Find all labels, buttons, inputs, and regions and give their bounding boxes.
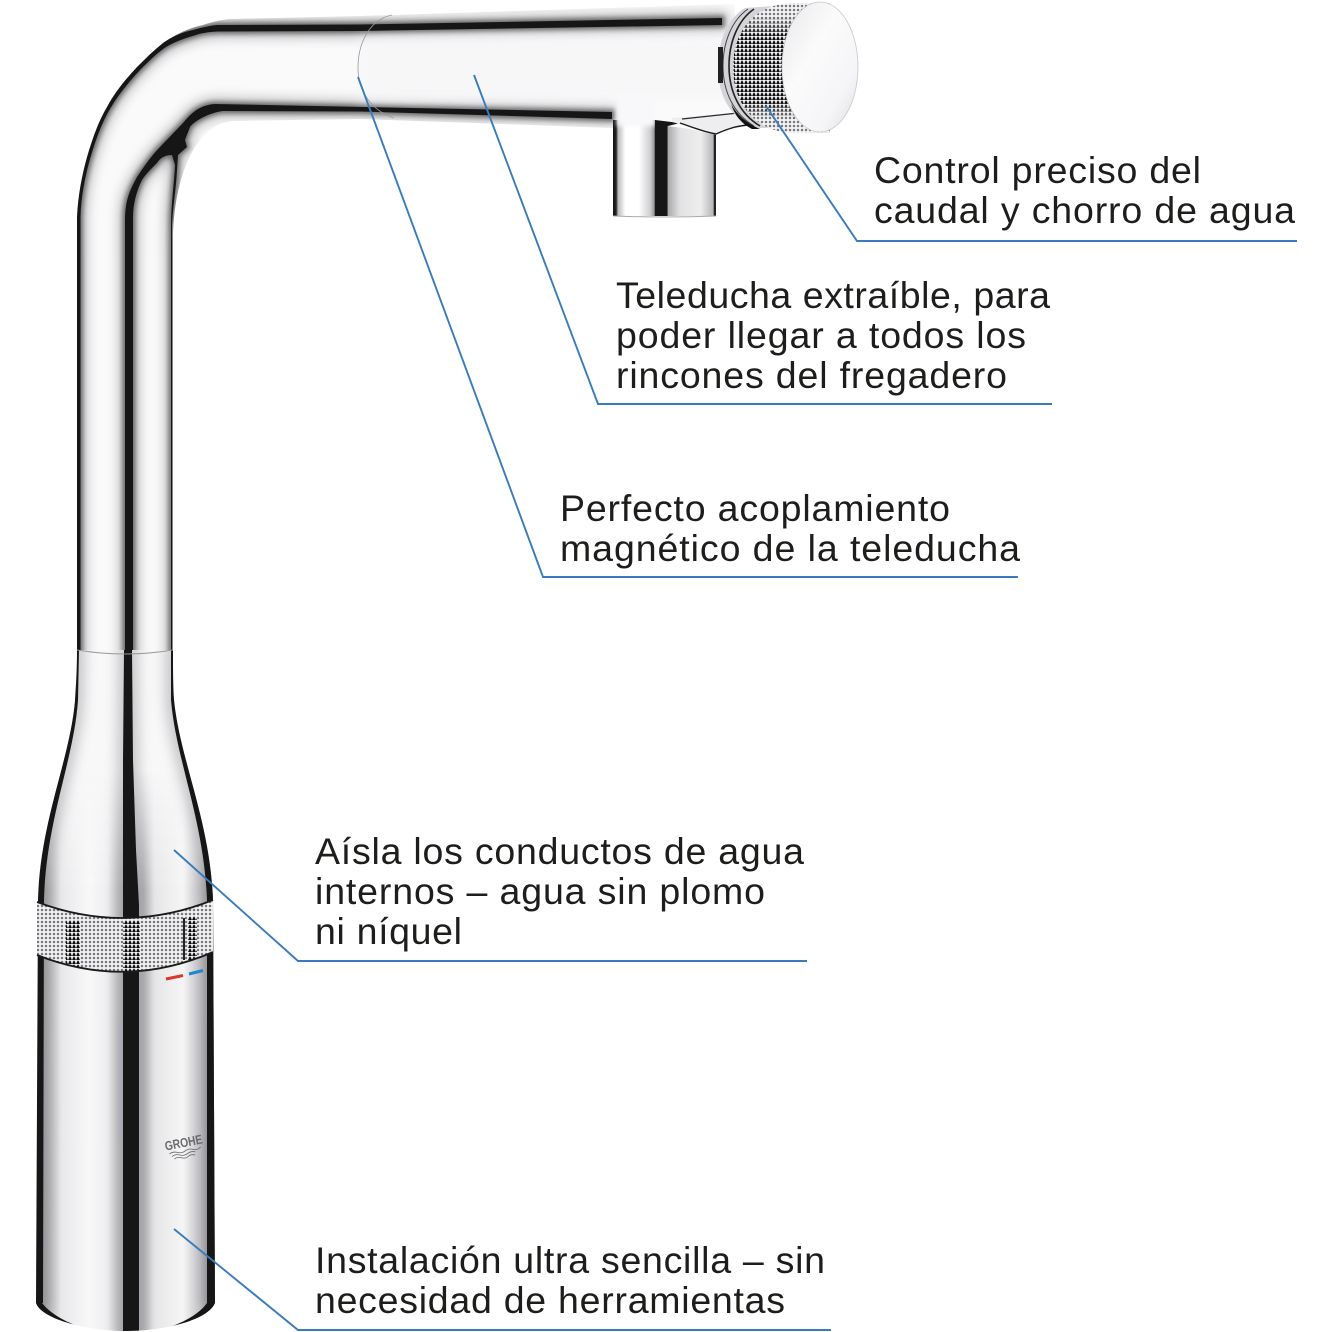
GROHE logo: GROHE [163, 1132, 204, 1154]
label text [560, 487, 1020, 569]
label text [616, 274, 1050, 396]
GROHE logo [163, 1132, 205, 1161]
label text: Perfecto acoplamiento [560, 487, 950, 529]
label text: poder llegar a todos los [616, 314, 1026, 356]
cold water mark [189, 970, 203, 974]
pull-out nozzle [613, 96, 748, 217]
spout seam [358, 15, 394, 118]
label text: magnético de la teleducha [560, 527, 1020, 569]
label text: Teleducha extraíble, para [616, 274, 1050, 316]
callout: teleducha extraíble [474, 75, 1052, 404]
callout: instalación [174, 1229, 831, 1330]
knurled knob [733, 3, 830, 133]
label text: internos – agua sin plomo [315, 870, 765, 912]
leader line [174, 1229, 831, 1330]
label text: necesidad de herramientas [315, 1279, 785, 1321]
leader line [766, 106, 1297, 241]
label text: ni níquel [315, 910, 462, 952]
hot water mark [166, 976, 183, 979]
label text [874, 149, 1295, 231]
upper tube and spout [70, 0, 750, 670]
leader line [358, 77, 1018, 577]
leader line [474, 75, 1052, 404]
label text [315, 830, 804, 952]
label text: Aísla los conductos de agua [315, 830, 804, 872]
label text [315, 1239, 825, 1321]
knurled band [36, 900, 214, 973]
body seam [77, 650, 173, 654]
label text: caudal y chorro de agua [874, 189, 1295, 231]
lower body [30, 645, 220, 1332]
faucet illustration [30, 0, 858, 1332]
label text: Instalación ultra sencilla – sin [315, 1239, 825, 1281]
label text: Control preciso del [874, 149, 1201, 191]
knob collar [718, 6, 775, 129]
callout: control de caudal [766, 106, 1297, 241]
knob cap [782, 2, 858, 132]
callout: acoplamiento magnético [358, 77, 1020, 577]
leader line [174, 850, 807, 961]
label text: rincones del fregadero [616, 354, 1007, 396]
callout: conductos de agua [174, 830, 807, 961]
